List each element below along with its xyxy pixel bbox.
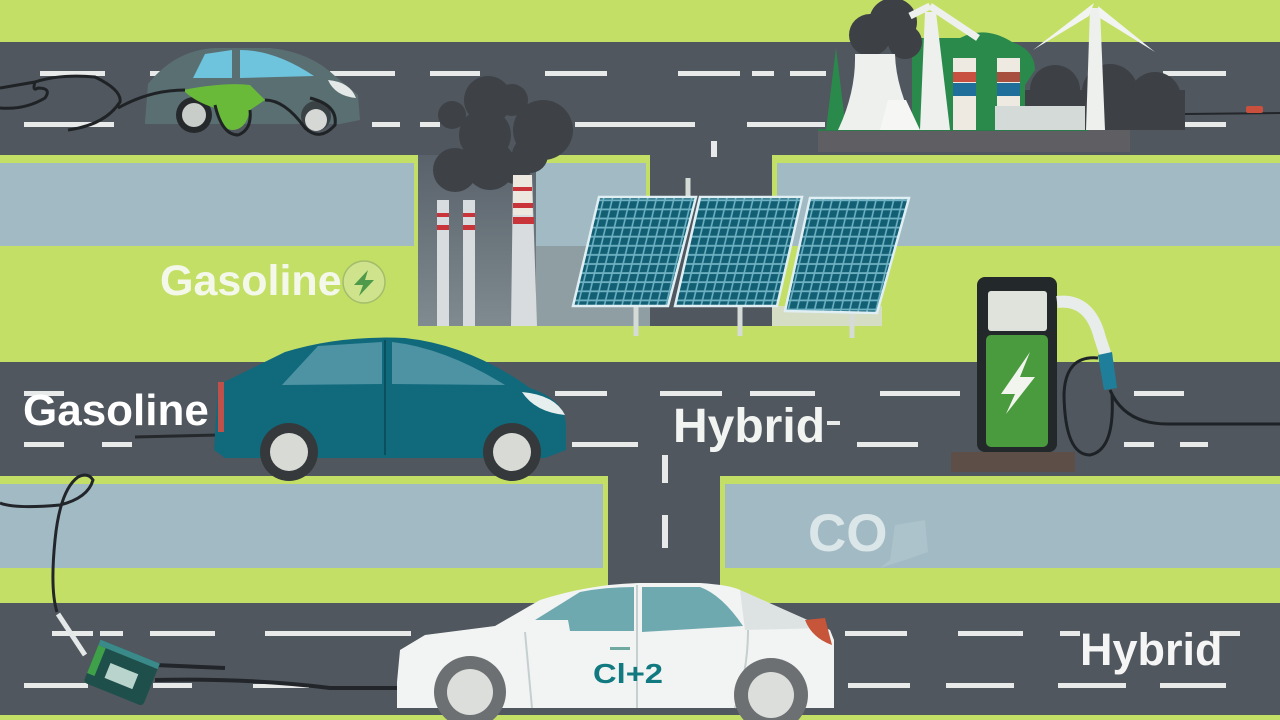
haze: pale smoke by CO [880,520,928,568]
cable: plug to white car [155,665,398,688]
panel: lower right water [725,484,1280,568]
panel: upper left water [0,163,414,246]
road: upper connector [650,150,772,326]
icon: teal car [214,338,566,481]
panel: upper right water [777,163,1280,246]
icon: charging station [951,277,1280,472]
icon: solar panels [573,178,909,338]
panel: upper centre water [536,163,646,246]
label: gasoline on green: Gasoline [160,257,342,305]
road: bottom [0,603,1280,715]
road: top [0,42,1280,155]
icon: top car with cable [0,48,360,135]
icon: factory smokestacks [433,76,573,326]
road: lower connector [608,470,720,610]
icon: plug charger [83,640,160,706]
panel: lower left water [0,484,603,568]
icon: white car [397,583,834,720]
label: gasoline on road: Gasoline [23,386,209,435]
icon: power plant and wind turbines [818,0,1280,152]
panel: haze behind solar [536,246,650,326]
label: hybrid middle: Hybrid [673,400,825,453]
icon: small charge badge [343,261,385,303]
panel: factory yard [418,155,536,326]
panel: pale base under solar [772,306,882,326]
label: hybrid bottom: Hybrid [1080,624,1223,675]
cable: behind teal car [135,435,218,437]
cable: lower left charger [0,475,93,612]
label: car CO2: Cl+2 [593,658,663,689]
cable: white strain relief [58,614,85,655]
label: CO faded: CO [808,504,888,563]
road: middle [0,362,1280,476]
